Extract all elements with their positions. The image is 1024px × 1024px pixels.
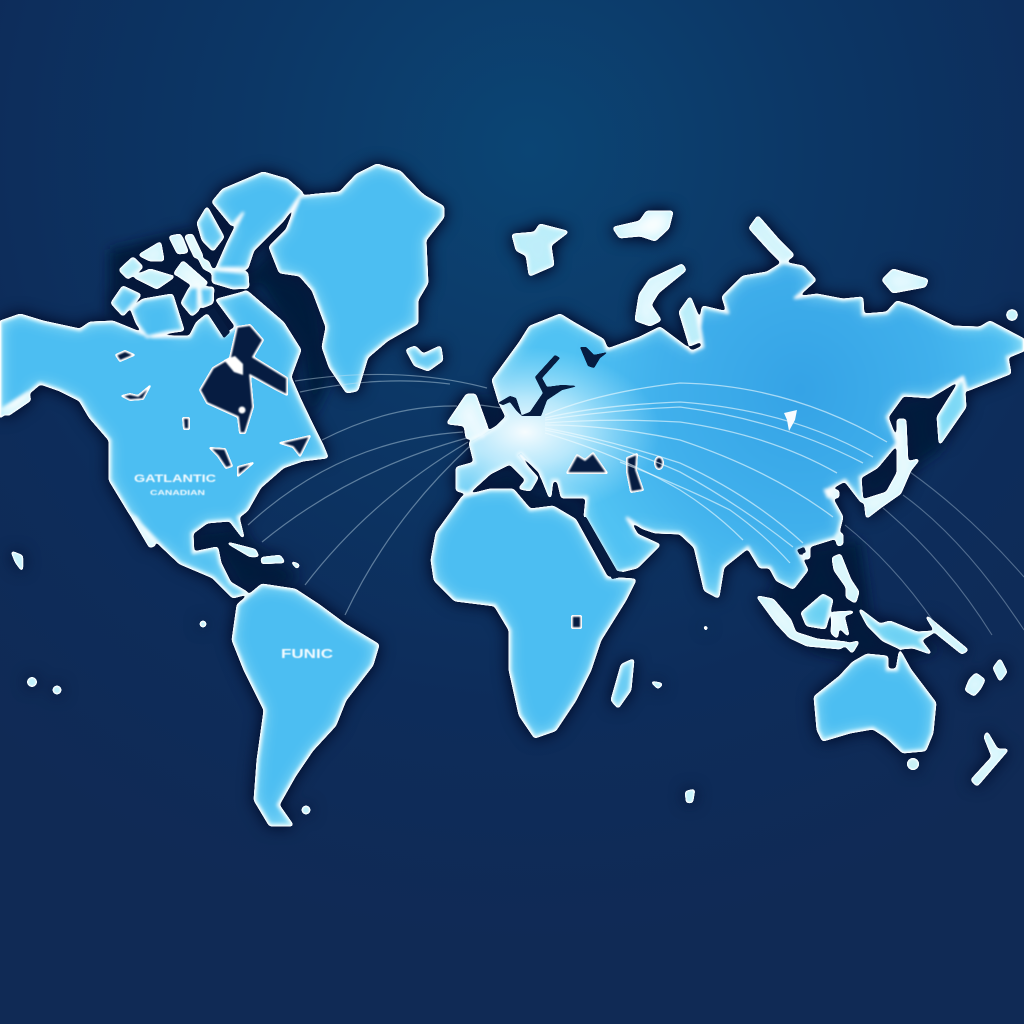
- small ocean islands: [0, 392, 918, 814]
- islands: Southeast Asia: [758, 555, 1006, 695]
- label: North America: GATLANTIC: [134, 473, 216, 485]
- flight lines: Pacific: [845, 472, 1024, 635]
- Aral Sea: [655, 457, 663, 469]
- Hudson Bay: [200, 325, 287, 433]
- island: Greenland: [270, 165, 443, 392]
- arctic islands: Eurasia: [513, 212, 1016, 345]
- marker: central Asia: [784, 410, 797, 431]
- island: New Zealand: [972, 733, 1007, 785]
- Gulf of Tonkin patch: [797, 547, 806, 555]
- island: Britain: [448, 395, 487, 438]
- label: North America: [134, 473, 216, 497]
- Baltic Sea: [520, 355, 578, 416]
- Caspian Sea: [627, 454, 643, 492]
- island: Iceland region: [407, 347, 442, 370]
- shallow dark seas: [110, 230, 960, 665]
- continent: North America: [0, 292, 327, 597]
- Hudson Bay islands: [224, 356, 246, 414]
- North American lakes: [116, 351, 253, 476]
- African lake: [572, 616, 581, 628]
- continent: Australia: [815, 652, 935, 752]
- White Sea: [580, 347, 608, 368]
- seas and lakes: [116, 308, 806, 628]
- flight lines: Atlantic: [248, 374, 502, 615]
- Skagerrak: [498, 396, 522, 416]
- island: Madagascar: [612, 660, 633, 707]
- Arctic channel: [207, 308, 230, 338]
- land masses: [0, 165, 1024, 825]
- continent: South America: [233, 585, 378, 825]
- flight lines: Asia: [545, 383, 887, 563]
- Gulf of St Lawrence: [280, 436, 310, 456]
- label: South America: FUNIC: [281, 646, 334, 661]
- bright glow over Europe: [457, 352, 652, 499]
- continent: Eurasia: [457, 263, 1024, 597]
- islands: Japan and Sakhalin: [804, 377, 965, 558]
- label: North America: CANADIAN: [150, 490, 205, 497]
- islands: Canadian Arctic: [112, 173, 302, 337]
- Black Sea: [567, 453, 607, 473]
- continent: Africa: [432, 490, 635, 737]
- Red Sea: [579, 517, 634, 579]
